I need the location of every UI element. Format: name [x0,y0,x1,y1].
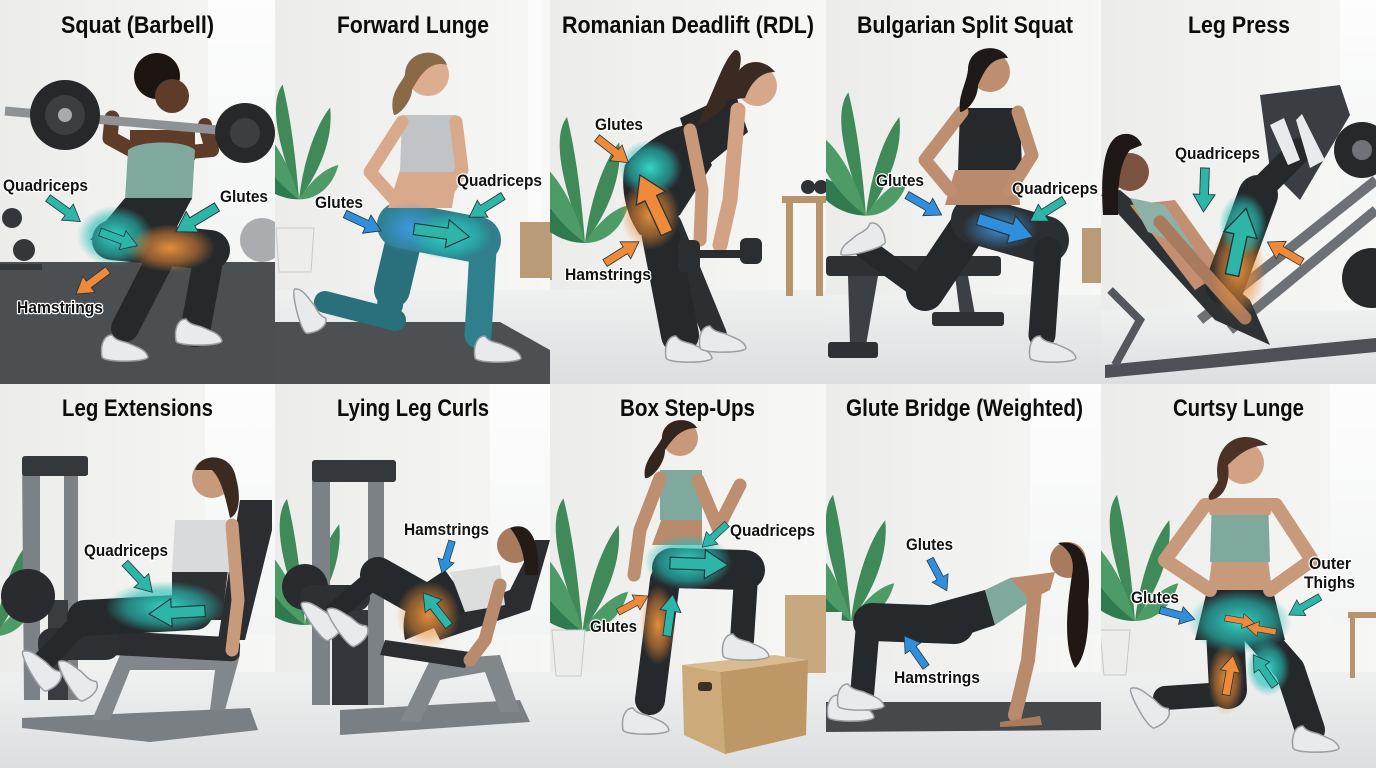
panel: Curtsy Lunge [1076,384,1376,768]
title: Forward Lunge [337,12,489,39]
figure: lunging woman [291,53,521,362]
panel: Box Step-Ups [520,384,826,768]
arrow: outer thighs [1284,589,1324,623]
arrow: quadriceps [45,194,81,222]
arrow: quadriceps on thigh [412,218,470,248]
label: Hamstrings [565,265,651,284]
icon: pot [276,228,314,272]
icon: bench [826,256,1004,358]
icon: plant [550,117,628,243]
label: Quadriceps [1175,144,1260,163]
title: Squat (Barbell) [61,12,214,39]
icon: plant [792,495,894,621]
arrow: quadriceps on thigh [1215,205,1263,279]
label: outer thighs: Outer [1309,554,1351,573]
arrow: hamstrings [76,266,111,294]
label: Hamstrings [17,298,103,317]
icon: plant [520,498,628,632]
arrow: quadriceps [118,556,160,599]
barbell [5,80,275,163]
label: Glutes [315,193,363,212]
icon: stool [782,196,826,296]
title: Bulgarian Split Squat [857,12,1073,39]
label: outer thighs [1304,554,1355,592]
arrow: glutes [594,134,629,164]
label: Glutes [590,617,637,636]
panel: Bulgarian Split Squat [808,0,1101,384]
label: Glutes [906,535,953,554]
figure: curtsy woman [1127,437,1339,752]
icon: leg press machine [1101,85,1376,378]
label: outer thighs: Thighs [1304,573,1355,592]
figure: stepping woman [622,420,769,734]
figure: seated woman [19,457,239,704]
figure: reclined woman [298,526,538,660]
arrow: inner thigh on leg [1245,649,1283,691]
icon: pot [1100,630,1130,675]
icon: leg curl machine [282,460,550,735]
title: Leg Extensions [62,395,213,422]
arrow: quadriceps on thigh [98,228,138,250]
icon: leg extension machine [1,456,272,742]
arrow: glutes [614,589,652,620]
figure: reclined woman [1102,114,1325,318]
label: Glutes [876,171,924,190]
arrow: hamstrings on thigh [415,586,457,632]
panel: Leg Press [1101,0,1376,384]
label: Quadriceps [730,521,815,540]
arrow: quadriceps [696,518,733,553]
arrow: glutes [922,555,955,595]
arrow: glutes [342,210,382,234]
icon: dumbbells on stool [801,180,828,194]
arrow: quadriceps on thigh [669,549,728,580]
arrow: quadriceps on thigh [976,213,1032,244]
title: Leg Press [1188,12,1290,39]
title: Romanian Deadlift (RDL) [562,12,814,39]
panel: Forward Lunge [245,0,550,384]
figure: hinging woman [618,50,777,362]
arrow: hamstrings [602,241,640,267]
panel: Glute Bridge (Weighted) [792,384,1101,768]
label: Quadriceps [1012,179,1098,198]
label: Quadriceps [84,541,168,560]
icon: plant [826,92,906,216]
figure: bridge woman [827,542,1089,727]
arrow: quadriceps on thigh [148,597,206,628]
title: Curtsy Lunge [1173,395,1304,422]
arrow: quadriceps [1192,168,1216,212]
figure: squatting woman [77,53,222,361]
arrow: hamstrings on leg [636,174,674,236]
icon: plant [1076,495,1178,621]
icon: plant [275,84,338,200]
panel: Leg Extensions [0,384,275,768]
label: Glutes [220,187,268,206]
label: Hamstrings [894,668,980,687]
panel: Squat (Barbell) [0,0,284,384]
icon: cabinet [785,595,826,673]
panel: Lying Leg Curls [246,384,550,768]
arrow: hamstring on leg [1216,654,1243,697]
label: Quadriceps [3,176,88,195]
arrow: hamstrings [434,539,460,576]
title: Lying Leg Curls [337,395,489,422]
arrow: hamstrings on thigh [657,593,683,637]
icon: wooden box [682,655,808,754]
label: Glutes [595,115,643,134]
arrow: glutes [904,191,942,216]
arrow: glutes on hip [1224,611,1256,631]
arrow: glutes [1158,601,1197,628]
arrow: hamstrings [896,630,934,672]
arrow: hamstrings [1262,233,1307,271]
icon: pot [826,612,842,656]
arrow: quadriceps [468,192,506,218]
arrow: glutes [175,202,220,232]
icon: pot [552,630,585,676]
label: Hamstrings [404,520,489,539]
arrow: outer thigh on hip [1245,619,1277,639]
icon: plant [246,499,348,625]
title: Glute Bridge (Weighted) [846,395,1083,422]
label: Glutes [1131,588,1179,607]
icon: plant [0,524,33,636]
figure: split squat woman [835,48,1076,362]
label: Quadriceps [457,171,542,190]
arrow: quadriceps [1030,196,1067,222]
title: Box Step-Ups [620,395,755,422]
icon: side table [1348,612,1376,678]
panel: Romanian Deadlift [550,0,826,384]
